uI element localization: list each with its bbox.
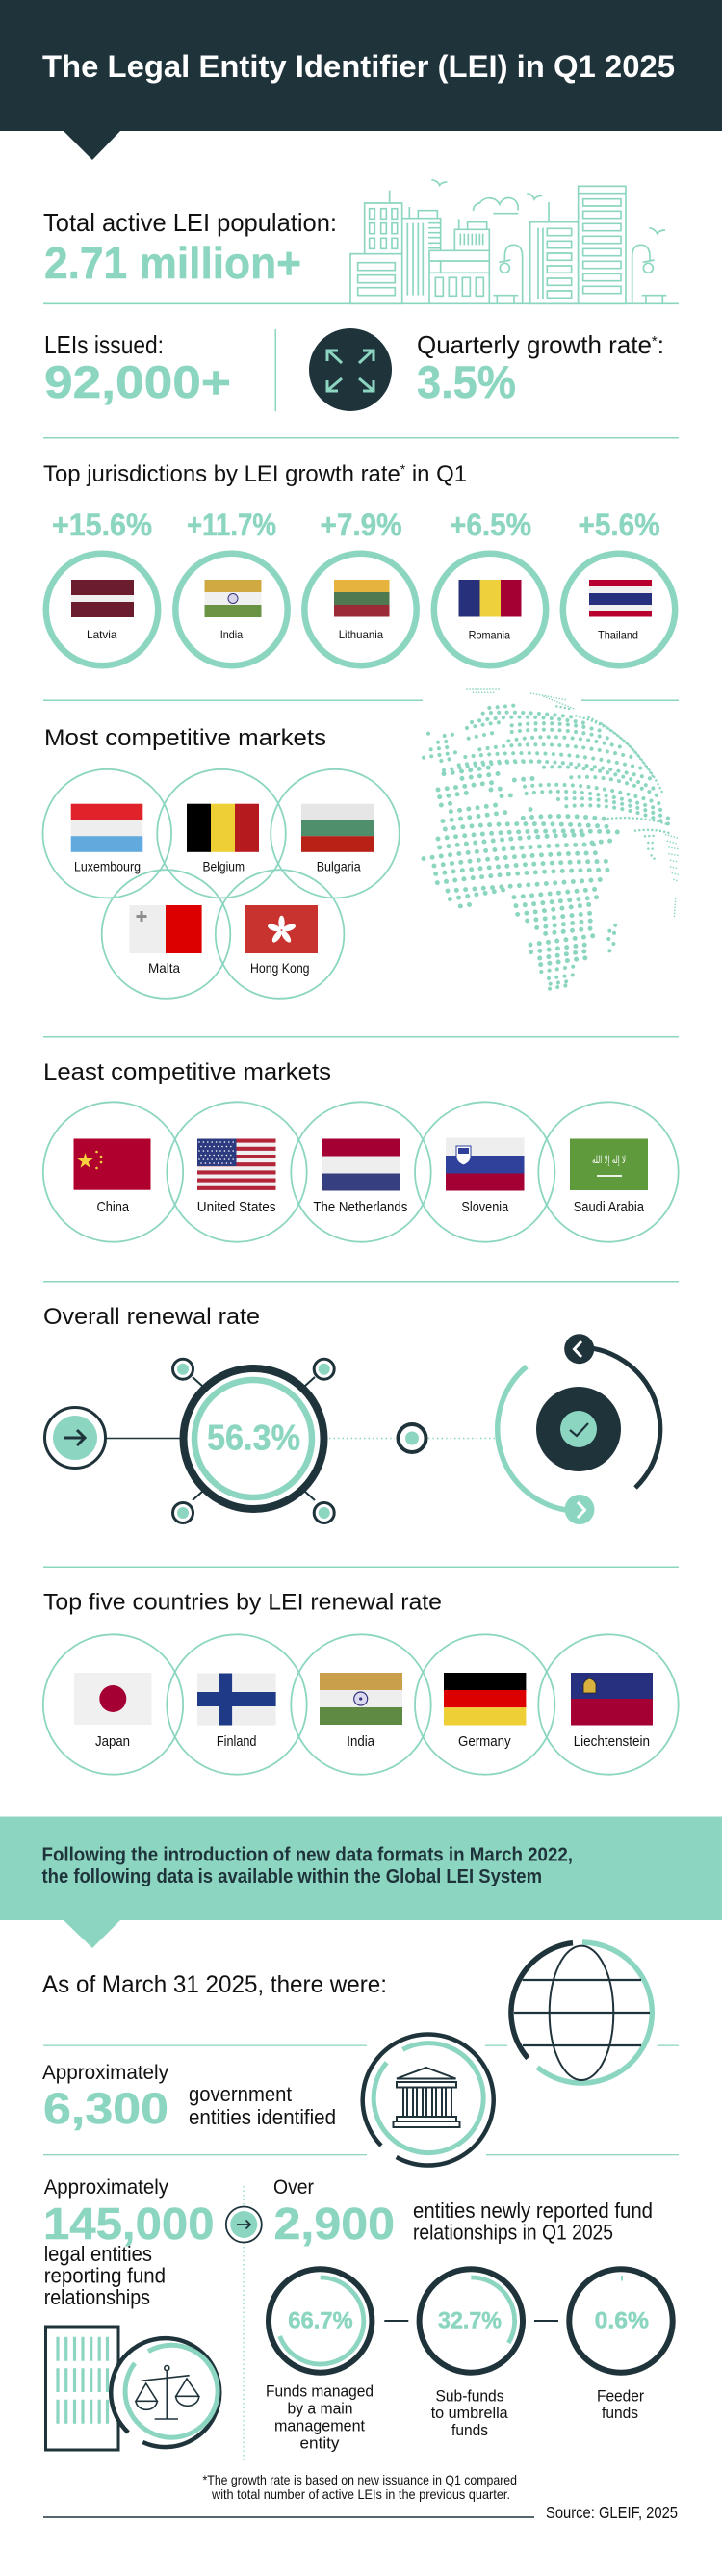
illustration: city skyline <box>43 180 679 303</box>
icon: node <box>399 1424 425 1452</box>
growth figures: +7.9% <box>320 507 402 542</box>
heading: Top jurisdictions by LEI growth rate <box>43 461 401 487</box>
heading: Least competitive markets <box>43 1059 331 1085</box>
circle: Germany: Germany <box>458 1733 511 1750</box>
icon: document with bars <box>46 2327 118 2450</box>
circle: Japan <box>43 1634 183 1775</box>
icon: expanding arrows <box>309 328 392 411</box>
footnote: with total number of active LEIs in the previous quarter. <box>211 2486 510 2502</box>
banner: new data formats <box>0 1816 722 1948</box>
circle: Japan: Japan <box>95 1733 130 1750</box>
circle: Finland: Finland <box>217 1733 256 1750</box>
growth figures: +6.5% <box>450 507 531 542</box>
heading: as of March 31 2025: As of March 31 2025, there were: <box>42 1971 387 1998</box>
banner: new data formats: the following data is available within the Global LEI System <box>42 1866 542 1887</box>
gauge: feeder funds 0.6%: 0.6% <box>595 2307 649 2333</box>
icon: scales of justice <box>111 2338 222 2450</box>
header banner <box>0 0 722 160</box>
gauge: sub-funds 32.7%: to umbrella <box>431 2404 508 2422</box>
stat: quarterly growth rate: : <box>658 330 664 359</box>
ring: Lithuania: Lithuania <box>339 628 384 641</box>
title: The Legal Entity Identifier (LEI) in Q1 2025 <box>42 49 675 84</box>
stat: LEIs issued: 92,000+ <box>44 356 231 407</box>
ring: India <box>175 554 288 665</box>
stat: total active LEI population: 2.71 million+ <box>44 238 301 288</box>
stat: legal entities reporting fund relationships: reporting fund <box>44 2264 166 2288</box>
stat: government entities: entities identified <box>189 2105 336 2129</box>
circle: Malta <box>102 870 230 999</box>
circle: Saudi Arabia <box>538 1102 679 1242</box>
circle: China: China <box>96 1199 130 1215</box>
gauge: feeder funds 0.6%: funds <box>602 2404 638 2422</box>
heading: * <box>400 461 406 477</box>
stat: total active LEI population <box>43 208 337 288</box>
gauge: funds managed 66.7%: by a main <box>287 2400 352 2418</box>
stat: legal entities reporting fund relationships: legal entities <box>44 2242 152 2266</box>
circle: Luxembourg: Luxembourg <box>74 859 141 874</box>
stat: government entities: Approximately <box>42 2061 168 2084</box>
panel: least competitive markets <box>43 1059 679 1242</box>
circle: Saudi Arabia: Saudi Arabia <box>574 1199 645 1215</box>
gauge: 56.3% <box>173 1359 334 1523</box>
growth figures: +15.6% <box>52 507 152 542</box>
circle: Bulgaria: Bulgaria <box>317 859 361 874</box>
stat: LEIs issued: LEIs issued: <box>44 330 164 359</box>
illustration: dotted globe <box>424 689 678 989</box>
stat: quarterly growth rate: Quarterly growth rate <box>417 330 652 359</box>
circle: China <box>43 1102 183 1242</box>
circle: Belgium <box>157 769 286 898</box>
gauge: funds managed 66.7% <box>266 2269 374 2452</box>
growth figures: +5.6% <box>578 507 660 542</box>
panel: top jurisdictions by growth rate <box>43 461 675 665</box>
ring: Latvia: Latvia <box>87 628 117 641</box>
stat: newly reported fund relationships: relationships in Q1 2025 <box>413 2221 613 2245</box>
ring: Lithuania <box>304 554 417 665</box>
circle: Luxembourg <box>42 769 171 898</box>
gauge: 56.3%: 56.3% <box>207 1418 300 1458</box>
ring: India: India <box>220 628 243 641</box>
gauge: feeder funds 0.6%: Feeder <box>597 2386 644 2405</box>
circle: Bulgaria <box>271 769 400 898</box>
circle: Hong Kong <box>216 870 344 999</box>
footnote <box>202 2472 517 2502</box>
circle: United States: United States <box>197 1199 276 1215</box>
circle: Finland <box>167 1634 307 1775</box>
gauge: funds managed 66.7%: 66.7% <box>288 2307 353 2333</box>
source line: Source: GLEIF, 2025 <box>546 2503 678 2522</box>
stat: LEIs issued <box>44 330 231 407</box>
ring: Latvia <box>46 554 158 665</box>
growth figures <box>52 507 660 542</box>
circle: The Netherlands <box>291 1102 431 1242</box>
ring: Thailand <box>563 554 675 665</box>
stat: legal entities reporting fund relationships <box>43 2175 214 2309</box>
stat: legal entities reporting fund relationships: relationships <box>44 2285 150 2309</box>
growth figures: +11.7% <box>187 507 276 542</box>
circle: Slovenia: Slovenia <box>461 1199 509 1215</box>
stat: government entities: 6,300 <box>43 2084 168 2133</box>
heading: Top five countries by LEI renewal rate <box>43 1589 442 1616</box>
stat: total active LEI population: Total active LEI population: <box>43 208 337 237</box>
heading: Most competitive markets <box>44 725 326 751</box>
icon: renewal cycle check <box>498 1334 660 1524</box>
gauge: sub-funds 32.7%: Sub-funds <box>435 2386 504 2405</box>
circle: Germany <box>415 1634 554 1775</box>
banner: new data formats: Following the introduction of new data formats in March 2022, <box>42 1845 573 1866</box>
stat: quarterly growth rate: 3.5% <box>417 356 516 407</box>
panel: overall renewal rate <box>43 1304 660 1524</box>
gauge: funds managed 66.7%: Funds managed <box>266 2381 374 2400</box>
circle: Liechtenstein: Liechtenstein <box>574 1733 650 1750</box>
icon: government building <box>363 2035 494 2166</box>
gauge: feeder funds 0.6% <box>569 2269 673 2422</box>
stat: newly reported fund relationships <box>273 2175 653 2249</box>
stat: quarterly growth rate <box>417 330 664 407</box>
panel: most competitive markets <box>42 725 400 999</box>
circle: Belgium: Belgium <box>202 859 245 874</box>
ring: Romania <box>434 554 546 665</box>
stat: quarterly growth rate: * <box>652 333 658 350</box>
stat: newly reported fund relationships: entities newly reported fund <box>413 2199 653 2223</box>
circle: India <box>291 1634 431 1775</box>
gauge: sub-funds 32.7%: 32.7% <box>438 2307 502 2333</box>
icon: arrow node <box>226 2207 262 2242</box>
stat: newly reported fund relationships: 2,900 <box>273 2199 395 2249</box>
stat: newly reported fund relationships: Over <box>273 2175 314 2199</box>
circle: Malta: Malta <box>148 960 180 976</box>
gauge: sub-funds 32.7% <box>420 2269 523 2439</box>
stat: legal entities reporting fund relationships: Approximately <box>44 2175 168 2199</box>
ring: Thailand: Thailand <box>598 628 638 641</box>
stat: legal entities reporting fund relationships: 145,000 <box>43 2199 214 2249</box>
stat: government entities <box>42 2061 336 2133</box>
icon: arrow node <box>44 1408 106 1468</box>
circle: Saudi Arabia: لا إله إلا الله <box>592 1154 626 1166</box>
heading: Overall renewal rate <box>43 1304 260 1330</box>
circle: The Netherlands: The Netherlands <box>313 1199 407 1215</box>
circle: United States <box>167 1102 307 1242</box>
gauge: sub-funds 32.7%: funds <box>451 2421 488 2439</box>
icon: globe <box>511 1942 652 2083</box>
circle: India: India <box>347 1733 375 1750</box>
stat: government entities: government <box>189 2082 292 2106</box>
heading: in Q1 <box>405 461 467 487</box>
panel: top five countries by renewal rate <box>43 1589 679 1775</box>
circle: Hong Kong: Hong Kong <box>250 960 310 976</box>
gauge: funds managed 66.7%: entity <box>300 2433 340 2452</box>
circle: Liechtenstein <box>538 1634 679 1775</box>
ring: Romania: Romania <box>469 628 510 641</box>
gauge: funds managed 66.7%: management <box>274 2417 365 2435</box>
circle: Slovenia <box>415 1102 554 1242</box>
footnote: *The growth rate is based on new issuance in Q1 compared <box>202 2472 517 2487</box>
